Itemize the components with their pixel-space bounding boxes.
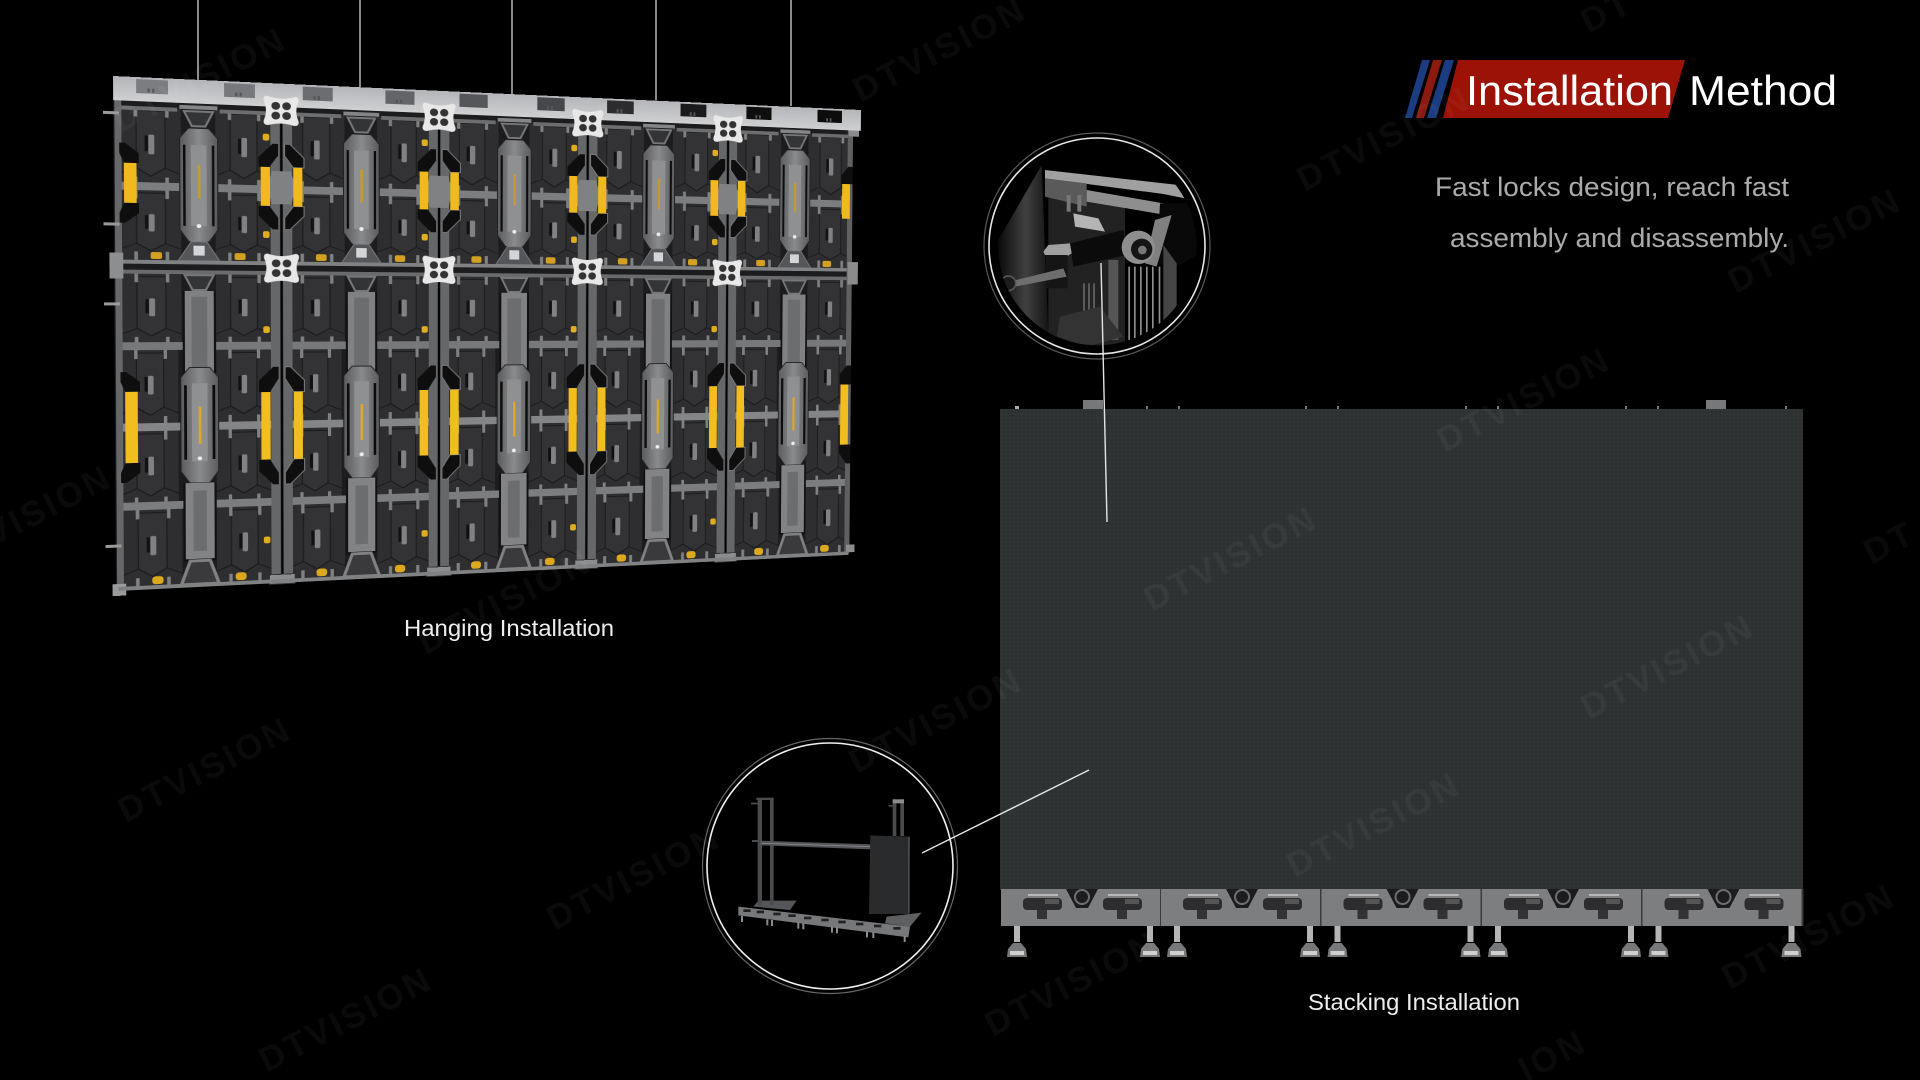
title text: Installation	[1466, 67, 1673, 114]
label: stacking installation: Stacking Installation	[1308, 989, 1520, 1015]
red title band	[1443, 60, 1685, 118]
watermarks: DTVISION	[107, 19, 293, 140]
watermarks: DTVISION	[112, 709, 298, 830]
LED screen face	[1000, 409, 1803, 890]
foreground drawing layer	[406, 60, 1834, 1015]
description text: Fast locks design, reach fast	[1435, 172, 1790, 202]
connector line: screen to stacking frame	[922, 770, 1089, 853]
watermarks: DTVISION	[1575, 606, 1761, 727]
title badge	[1405, 60, 1837, 118]
watermarks: DTVISION	[1722, 180, 1908, 301]
base frames with feet	[1001, 889, 1804, 957]
top steel bar	[113, 76, 861, 131]
watermarks: DTVISION	[979, 923, 1165, 1044]
white corner joints	[264, 96, 743, 286]
watermarks: DTVISION	[1716, 876, 1902, 997]
right edge	[838, 109, 862, 558]
watermarks: DTVISION	[412, 541, 598, 662]
icon: fast lock mechanism	[998, 165, 1200, 347]
connector line: screen to fast lock	[1101, 263, 1107, 522]
label: hanging installation: Hanging Installation	[404, 615, 614, 641]
watermarks: DTVISION	[843, 660, 1029, 781]
icon: accent stripes	[1405, 60, 1454, 118]
title badge: Method	[1689, 67, 1837, 114]
watermarks: DTVISION	[1431, 339, 1617, 460]
watermarks: DTVISION	[1281, 764, 1467, 885]
callout: fast lock detail circle	[984, 133, 1210, 359]
panel: hanging installation LED cabinets rear view	[103, 76, 861, 596]
description text	[1435, 172, 1790, 253]
cabinet back base	[113, 76, 861, 590]
watermarks: DTVISION	[1138, 498, 1324, 619]
left edge and pins	[103, 100, 141, 596]
top hardware pins	[1015, 400, 1787, 409]
cabinets grid	[118, 102, 857, 592]
bottom rail	[118, 551, 849, 591]
panel: stacking installation LED screen	[1000, 400, 1804, 957]
watermarks: DTVISION	[1291, 78, 1477, 199]
icon: stacking frame with cabinet	[738, 798, 922, 942]
centre seam rails	[119, 260, 856, 272]
watermarks: DTVISION	[253, 959, 439, 1080]
callout: stacking frame detail circle	[702, 738, 958, 994]
watermarks: DTVISION	[541, 817, 727, 938]
description text: assembly and disassembly.	[1450, 223, 1789, 253]
